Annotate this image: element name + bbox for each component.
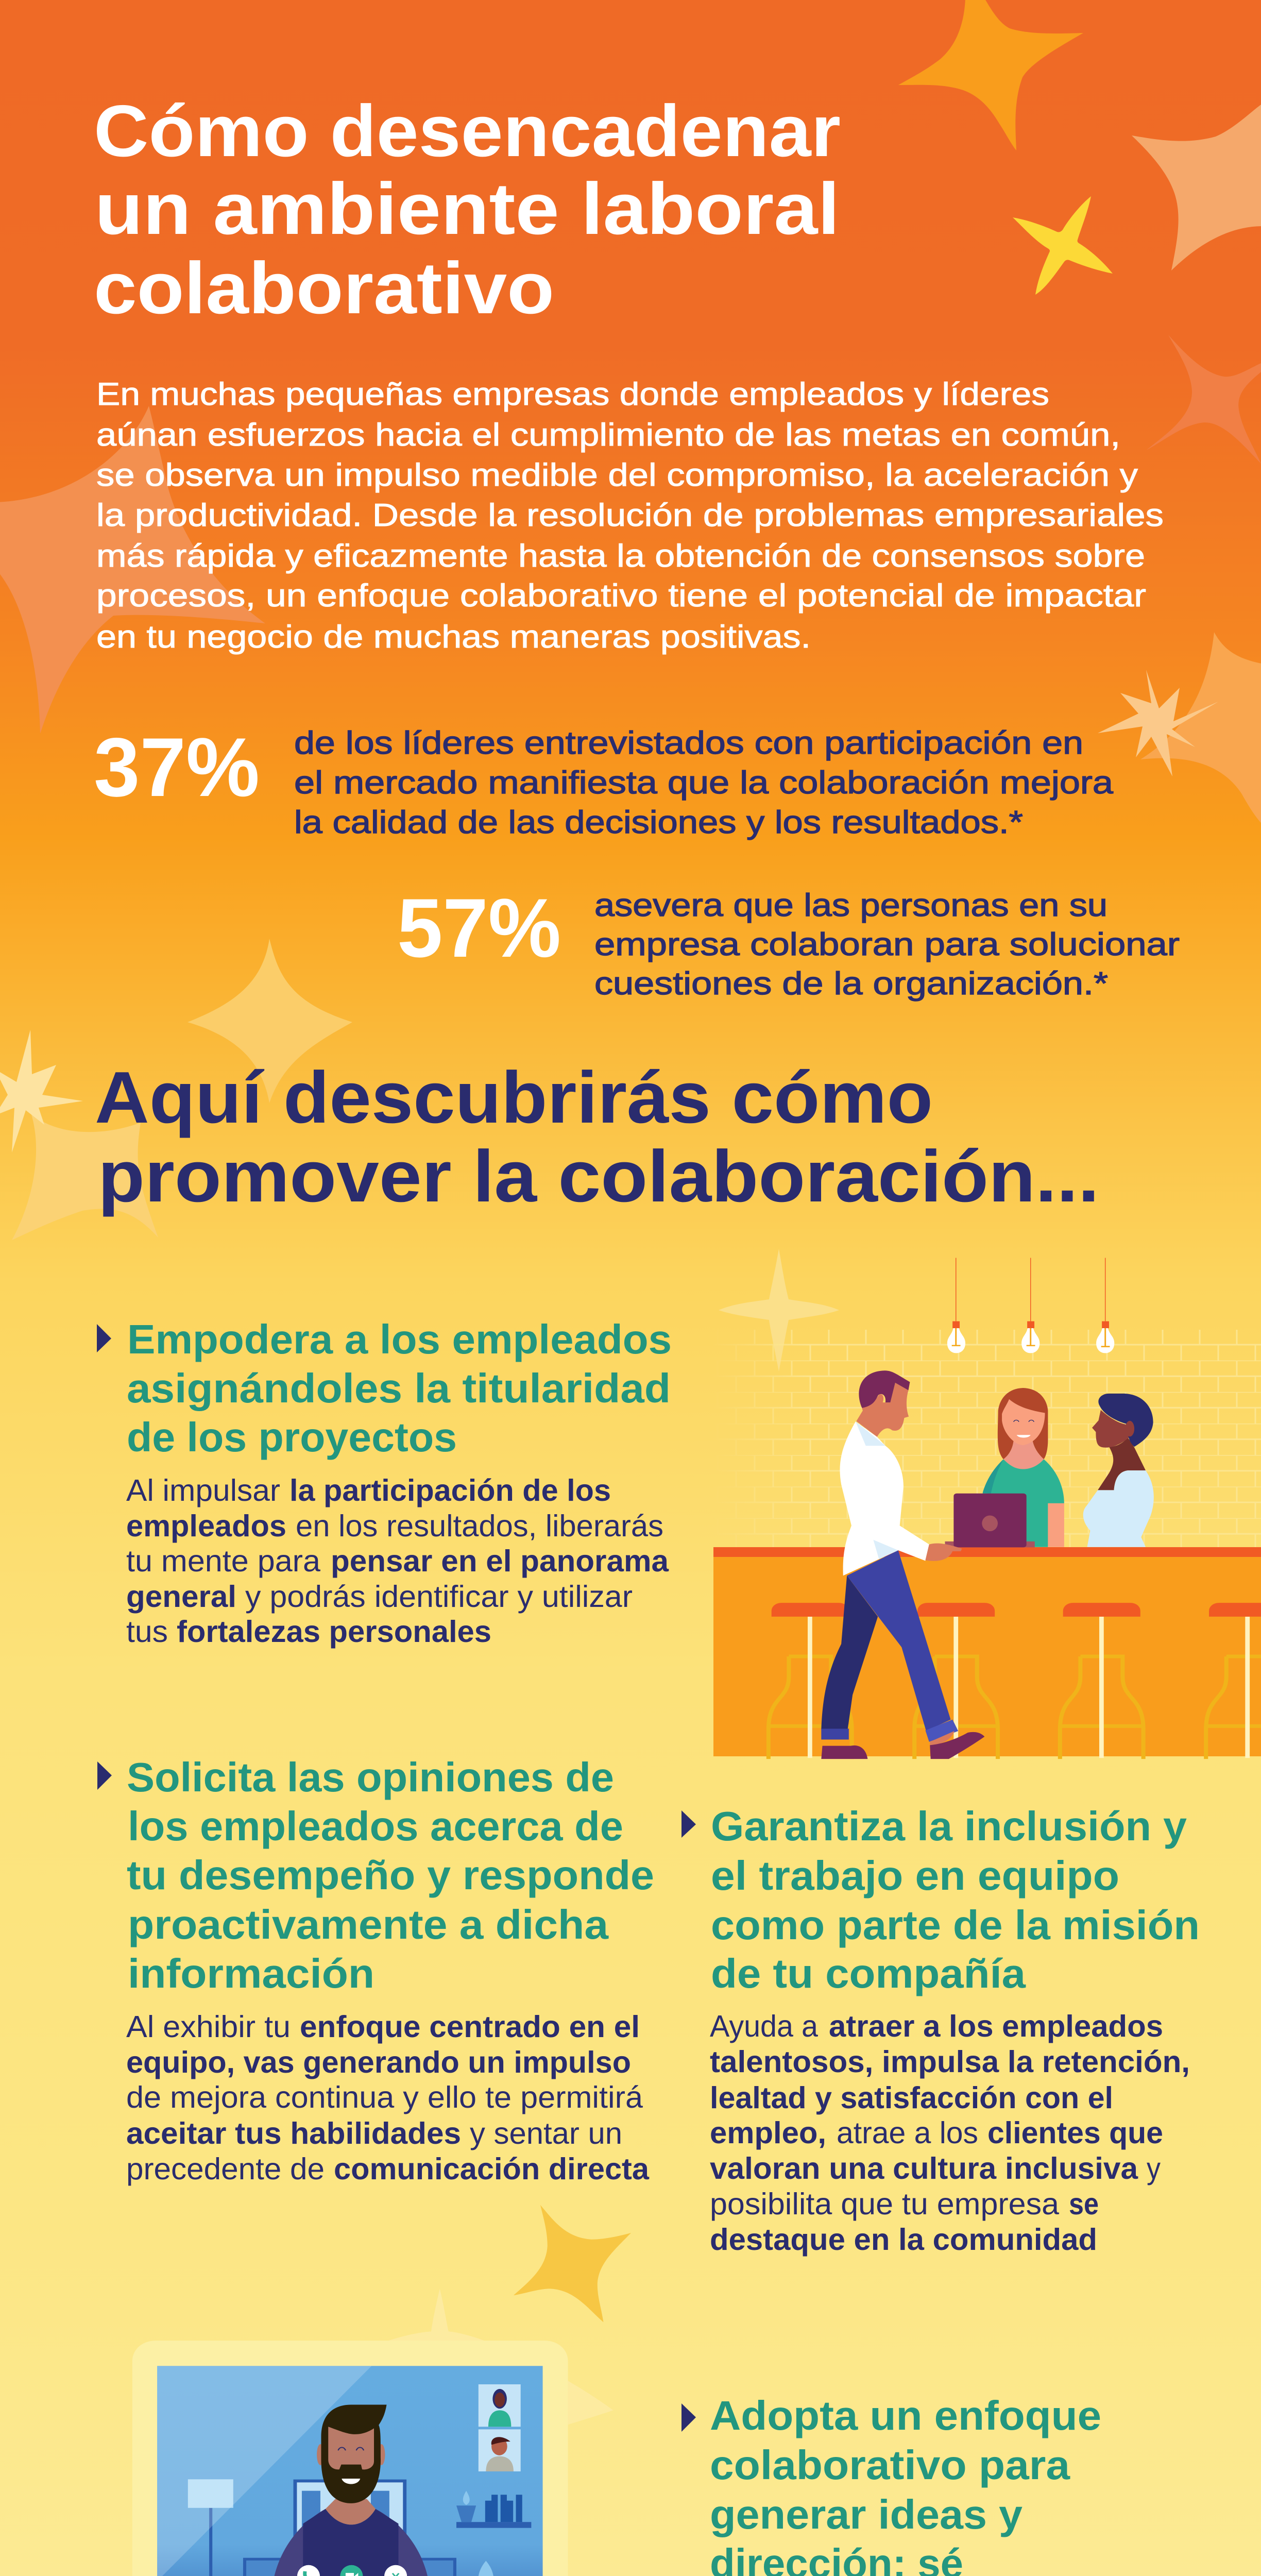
tip 3: garantiza la inclusión: lealtad y satisfacción con el	[710, 2081, 1113, 2115]
tip 2: solicita opiniones	[97, 1754, 654, 2186]
tip 3: garantiza la inclusión: valoran una cultura inclusiva	[710, 2151, 1138, 2185]
tip 1: empodera: tus	[126, 1615, 168, 1649]
laptop	[945, 1494, 1035, 1547]
tip 3: garantiza la inclusión	[681, 1803, 1200, 2257]
tip 2: solicita opiniones: aceitar tus habilidades	[126, 2116, 461, 2150]
star: gold	[514, 2205, 631, 2322]
stat: 37%: la calidad de las decisiones y los resultados.*	[294, 805, 1023, 840]
star: small white burst	[1098, 670, 1218, 776]
tip 2: solicita opiniones: información	[128, 1951, 374, 1996]
tip 2: solicita opiniones: Al exhibir tu	[126, 2010, 291, 2044]
stat: 37%	[94, 721, 1114, 840]
stat: 57%: empresa colaboran para solucionar	[594, 927, 1180, 962]
tip 1: empodera: en los resultados, liberarás	[296, 1509, 663, 1543]
title: Cómo desencadenar	[94, 90, 841, 172]
call buttons	[297, 2565, 407, 2576]
tip 1: empodera: de los proyectos	[127, 1414, 457, 1460]
counter	[713, 1547, 1261, 1756]
star: centre pale	[188, 939, 352, 1103]
stat: 37%: de los líderes entrevistados con participación en	[294, 725, 1083, 761]
tip 4: adopta un enfoque: colaborativo para	[710, 2442, 1070, 2488]
tip 3: garantiza la inclusión: destaque en la comunidad	[710, 2223, 1097, 2257]
intro paragraph: En muchas pequeñas empresas donde empleados y líderes	[96, 377, 1049, 412]
title: un ambiente laboral	[95, 168, 840, 250]
tip 2: solicita opiniones: los empleados acerca de	[128, 1803, 623, 1849]
tip 2: solicita opiniones: Solicita las opiniones de	[127, 1754, 614, 1800]
tip 1: empodera: tu mente para	[126, 1544, 320, 1578]
intro paragraph: la productividad. Desde la resolución de problemas empresariales	[96, 498, 1164, 533]
title: colaborativo	[94, 247, 554, 329]
star: light orange right	[1146, 335, 1261, 464]
tip 3: garantiza la inclusión: atrae a los	[837, 2116, 978, 2150]
person: walking man	[821, 1370, 984, 1759]
star: near first scene	[719, 1249, 839, 1371]
laptop lid	[132, 2341, 568, 2576]
illustration: people at a bar counter	[713, 1258, 1261, 1759]
tip 3: garantiza la inclusión: Garantiza la inclusión y	[711, 1803, 1187, 1849]
section heading	[95, 1057, 1099, 1217]
section heading: Aquí descubrirás cómo	[95, 1057, 933, 1139]
stat: 57%: asevera que las personas en su	[594, 888, 1107, 923]
person: bearded man	[271, 2405, 431, 2576]
tip 1: empodera: general	[126, 1580, 236, 1614]
star: big lower left	[12, 1113, 158, 1240]
tip 3: garantiza la inclusión: posibilita que tu empresa	[710, 2187, 1059, 2221]
lamps	[947, 1258, 1114, 1353]
glass reflection	[157, 2366, 371, 2576]
intro paragraph: procesos, un enfoque colaborativo tiene el potencial de impactar	[96, 578, 1146, 614]
intro paragraph: se observa un impulso medible del compromiso, la aceleración y	[96, 457, 1138, 493]
stat: 37%: el mercado manifiesta que la colaboración mejora	[294, 765, 1114, 801]
participant thumbnails	[479, 2384, 521, 2471]
tip 3: garantiza la inclusión: atraer a los empleados	[829, 2009, 1163, 2043]
tip 2: solicita opiniones: precedente de	[126, 2152, 325, 2186]
star: small left burst	[0, 1030, 83, 1153]
stat: 37%: 37%	[94, 721, 260, 814]
person: woman with dark hair	[1083, 1394, 1154, 1547]
tip 2: solicita opiniones: proactivamente a dicha	[128, 1902, 609, 1947]
tip 2: solicita opiniones: enfoque centrado en el	[300, 2010, 640, 2044]
tip 2: solicita opiniones: de mejora continua y ello te permitirá	[126, 2080, 643, 2114]
tip 4: adopta un enfoque: Adopta un enfoque	[710, 2393, 1101, 2438]
brick wall	[713, 1330, 1261, 1547]
tip 1: empodera: la participación de los	[289, 1473, 611, 1507]
tip 1: empodera: Empodera a los empleados	[127, 1316, 672, 1362]
intro paragraph: en tu negocio de muchas maneras positivas.	[96, 619, 811, 655]
tip 3: garantiza la inclusión: como parte de la misión	[711, 1902, 1200, 1948]
intro paragraph	[96, 377, 1164, 655]
tip 3: garantiza la inclusión: se	[1069, 2187, 1099, 2221]
person: woman with red hair	[983, 1388, 1064, 1547]
tip 1: empodera: fortalezas personales	[177, 1615, 491, 1649]
tip 2: solicita opiniones: y sentar un	[470, 2116, 622, 2150]
intro paragraph: más rápida y eficazmente hasta la obtención de consensos sobre	[96, 538, 1145, 574]
section heading: promover la colaboración...	[98, 1136, 1099, 1217]
tip 2: solicita opiniones: comunicación directa	[334, 2152, 650, 2186]
stat: 57%: cuestiones de la organización.*	[594, 966, 1108, 1002]
tip 3: garantiza la inclusión: y	[1147, 2151, 1161, 2185]
star: yellow	[1013, 196, 1113, 295]
tip 1: empodera: Al impulsar	[126, 1473, 280, 1507]
star: big left	[0, 406, 265, 734]
tip 1: empodera: empleados	[126, 1509, 286, 1543]
tip 1: empodera	[97, 1316, 672, 1649]
tip 3: garantiza la inclusión: Ayuda a	[710, 2009, 818, 2043]
tip 4: adopta un enfoque: generar ideas y	[710, 2492, 1023, 2537]
tip 1: empodera: y podrás identificar y utilizar	[245, 1580, 633, 1614]
intro paragraph: aúnan esfuerzos hacia el cumplimiento de las metas en común,	[96, 417, 1120, 453]
star: pale behind laptop	[387, 2289, 614, 2460]
star: top right lower peach	[1140, 632, 1261, 829]
tip 1: empodera: asignándoles la titularidad	[127, 1365, 671, 1411]
tip 3: garantiza la inclusión: el trabajo en equipo	[711, 1853, 1119, 1899]
laptop screen	[157, 2366, 543, 2576]
room background	[188, 2479, 531, 2576]
scene drawn in local coordinates	[769, 1258, 1261, 1759]
star: peach right	[1132, 105, 1261, 270]
tip 3: garantiza la inclusión: talentosos, impulsa la retención,	[710, 2045, 1190, 2079]
decorative stars	[0, 0, 1261, 1371]
stools	[769, 1603, 1261, 1759]
stat: 57%	[397, 882, 1180, 1002]
tip 4: adopta un enfoque	[681, 2393, 1210, 2576]
stat: 57%: 57%	[397, 882, 561, 975]
star: top orange	[898, 0, 1083, 150]
tip 3: garantiza la inclusión: clientes que	[987, 2116, 1163, 2150]
tip 2: solicita opiniones: equipo, vas generando un impulso	[126, 2045, 631, 2079]
tip 3: garantiza la inclusión: de tu compañía	[711, 1951, 1026, 1996]
tip 1: empodera: pensar en el panorama	[331, 1544, 669, 1578]
title	[94, 90, 841, 329]
tip 3: garantiza la inclusión: empleo,	[710, 2116, 826, 2150]
tip 2: solicita opiniones: tu desempeño y responde	[127, 1852, 654, 1898]
illustration: laptop video call	[81, 2205, 631, 2576]
